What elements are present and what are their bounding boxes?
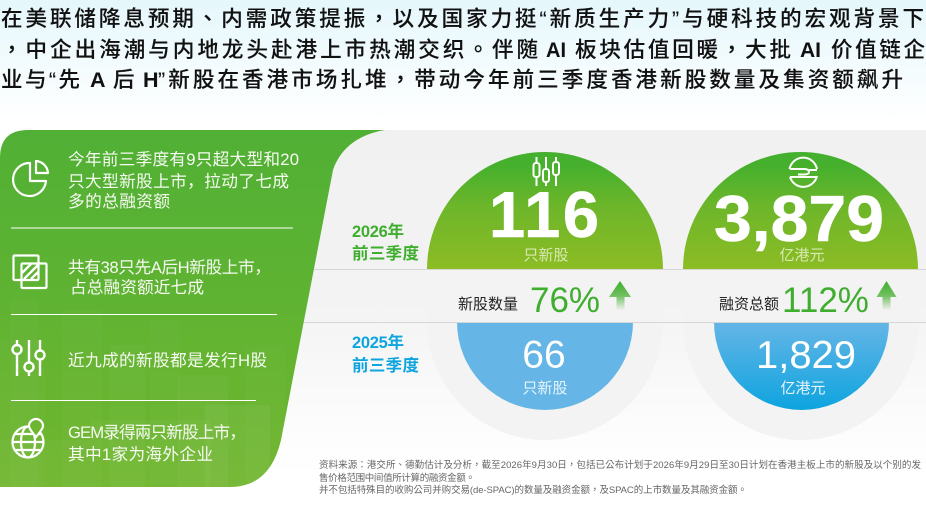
icon: currency circle (790, 158, 817, 187)
label: 2025 first three quarters (352, 332, 420, 375)
title: 后 (113, 68, 135, 92)
text: H shares: 近九成的新股都是发行H股 (68, 351, 267, 370)
text: super-large listings: 今年前三季度有9只超大型和20 (68, 150, 299, 169)
icon: pie chart (13, 161, 48, 196)
label: 2025 first three quarters: 前三季度 (352, 356, 420, 375)
text: A+H listings: 占总融资额近七成 (70, 278, 204, 297)
label: 2025 first three quarters: 2025年 (352, 332, 404, 352)
title: 板块估值回暖，大批 (575, 38, 791, 62)
text: GEM listings: GEM录得兩只新股上市， (68, 423, 246, 442)
chart: 2025 new listings half circle (457, 322, 633, 410)
stat: 66 new listings: 66 (522, 334, 566, 376)
stat: 3,879 HK$ 100M: 亿港元 (779, 247, 825, 264)
title: ，中企出海潮与内地龙头赴港上市热潮交织。伴随 (1, 38, 538, 62)
title: 业与“先 (1, 68, 80, 92)
footnote: 并不包括特殊目的收购公司并购交易(de-SPAC)的数量及融资金额，及SPAC的上市数量及其融资金额。 (319, 484, 747, 496)
header background (0, 0, 926, 122)
icon: candlesticks (534, 157, 559, 186)
footnote: 售价格范围中间值所计算的融资金额。 (319, 472, 475, 484)
title: H (143, 68, 159, 92)
icon: up arrow (876, 281, 896, 310)
stat: 3,879 HK$ 100M: 3,879 (714, 182, 884, 255)
text: GEM listings (68, 423, 246, 464)
stat: funds raised growth 112% (719, 281, 869, 320)
label: 2026 first three quarters (352, 221, 420, 263)
title: AI (546, 38, 566, 62)
label: 2026 first three quarters: 前三季度 (352, 244, 420, 263)
title: AI (800, 38, 821, 62)
text: super-large listings: 只大型新股上市，拉动了七成 (68, 172, 289, 191)
stat: funds raised growth 112%: 112% (782, 281, 869, 320)
chart: 2026 funds raised half circle (683, 152, 918, 269)
title: 在美联储降息预期、内需政策提振，以及国家力挺“新质生产力”与硬科技的宏观背景下 (1, 7, 924, 31)
stat: 1,829 HK$ 100M: 1,829 (756, 334, 856, 377)
stat: 66 new listings (522, 334, 568, 397)
stat: new listings growth 76%: 76% (530, 281, 600, 320)
icon: up arrow (609, 281, 631, 310)
stat: 1,829 HK$ 100M (756, 334, 856, 397)
icon: overlapping squares (14, 256, 46, 288)
text: super-large listings (68, 150, 299, 211)
footnote: 资料来源：港交所、德勤估计及分析，截至2026年9月30日，包括已公布计划于2026年9月29日至30日计划在香港主板上市的新股及以个别的发 (319, 459, 921, 471)
icon: sliders (12, 340, 44, 376)
stat: funds raised growth 112%: 融资总额 (719, 296, 779, 313)
title: A (90, 68, 106, 92)
text: A+H listings: 共有38只先A后H新股上市， (68, 258, 271, 277)
stat: 116 new listings: 116 (489, 178, 599, 251)
panel: statistics background (200, 130, 926, 475)
stat: 1,829 HK$ 100M: 亿港元 (780, 380, 826, 397)
panel: circle backdrops (427, 269, 919, 440)
text: super-large listings: 多的总融资额 (68, 192, 170, 211)
stat: 66 new listings: 只新股 (522, 380, 568, 397)
text: A+H listings (68, 258, 271, 297)
footnote (319, 459, 921, 496)
label: 2026 first three quarters: 2026年 (352, 221, 404, 241)
icon: globe with pin (12, 419, 44, 458)
panel: green key points (0, 130, 385, 487)
stat: new listings growth 76%: 新股数量 (458, 296, 518, 313)
stat: new listings growth 76% (458, 281, 600, 320)
chart: 2026 new listings half circle (427, 152, 663, 269)
title: 价值链企 (831, 38, 925, 62)
stat: 116 new listings: 只新股 (523, 247, 569, 264)
chart: 2025 funds raised half circle (714, 322, 889, 410)
title: ”新股在香港市场扎堆，带动今年前三季度香港新股数量及集资额飙升 (158, 68, 903, 92)
title (1, 7, 925, 92)
text: GEM listings: 其中1家为海外企业 (68, 445, 213, 464)
